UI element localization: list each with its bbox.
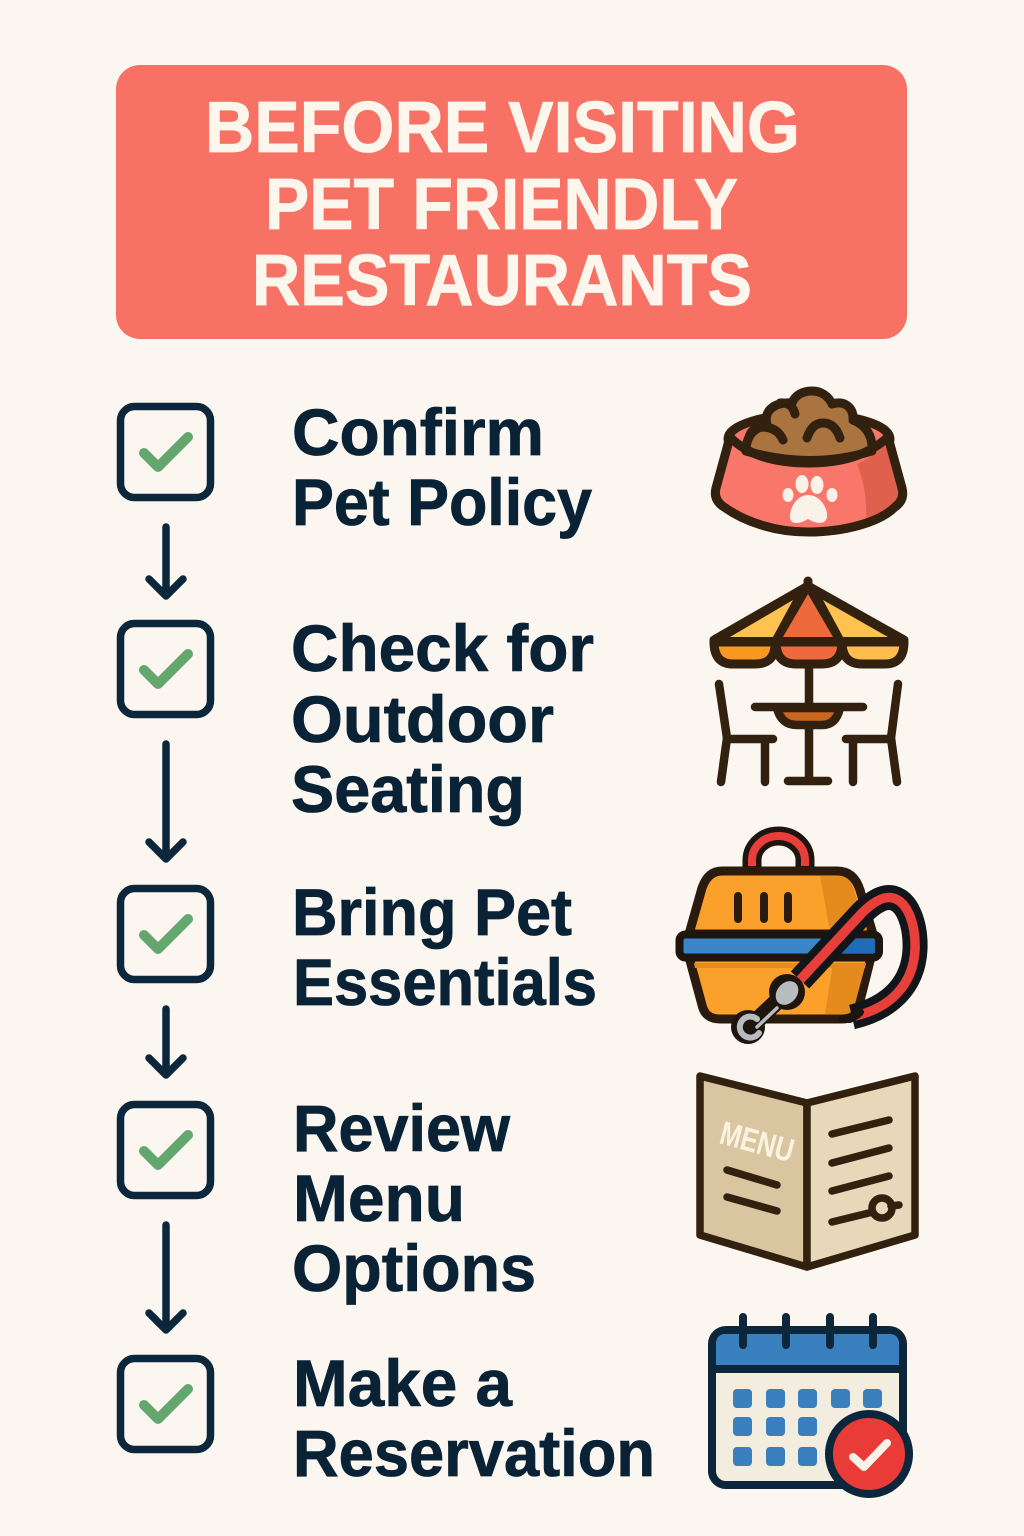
icon detail: leash clip: [731, 974, 805, 1044]
arrow 1 to 2: [149, 527, 183, 596]
step 3 checkbox: [120, 888, 210, 980]
step 4 label: Options: [292, 1231, 536, 1305]
step 2 label: Check for: [291, 611, 594, 685]
title banner: RESTAURANTS: [252, 241, 752, 321]
step 5 label: [293, 1346, 655, 1490]
icon: patio umbrella and table: [714, 581, 904, 782]
icon: food bowl: [715, 391, 903, 532]
arrow 3 to 4: [149, 1009, 183, 1075]
icon: open menu: MENU: [716, 1114, 798, 1169]
arrow 4 to 5: [149, 1225, 183, 1330]
step 1 label: Confirm: [292, 395, 544, 469]
step 2 label: [291, 611, 594, 826]
step 3 label: Essentials: [293, 945, 597, 1019]
step 5 label: Make a: [293, 1346, 513, 1420]
step 4 label: Review: [293, 1091, 511, 1165]
step 5 label: Reservation: [293, 1416, 655, 1490]
step 1 checkbox: [120, 406, 210, 498]
icon: pet carrier and leash: [680, 836, 915, 1044]
step 2 checkbox: [120, 624, 210, 714]
step 3 label: Bring Pet: [292, 875, 572, 949]
arrow 2 to 3: [149, 744, 183, 859]
step 1 label: [292, 395, 592, 539]
step 5 checkbox: [120, 1358, 210, 1450]
step 4 checkbox: [120, 1104, 210, 1196]
step 2 label: Outdoor: [291, 682, 554, 756]
step 2 label: Seating: [291, 752, 525, 826]
icon: open menu: [700, 1076, 915, 1267]
title banner: PET FRIENDLY: [265, 165, 738, 245]
step 4 label: [292, 1091, 536, 1305]
step 1 label: Pet Policy: [292, 465, 592, 539]
icon: calendar with check badge: [712, 1317, 909, 1494]
title banner: BEFORE VISITING: [205, 88, 800, 168]
step 3 label: [292, 875, 597, 1019]
title banner: [116, 65, 907, 339]
icon detail: paw print: [782, 475, 838, 523]
step 4 label: Menu: [293, 1161, 465, 1235]
